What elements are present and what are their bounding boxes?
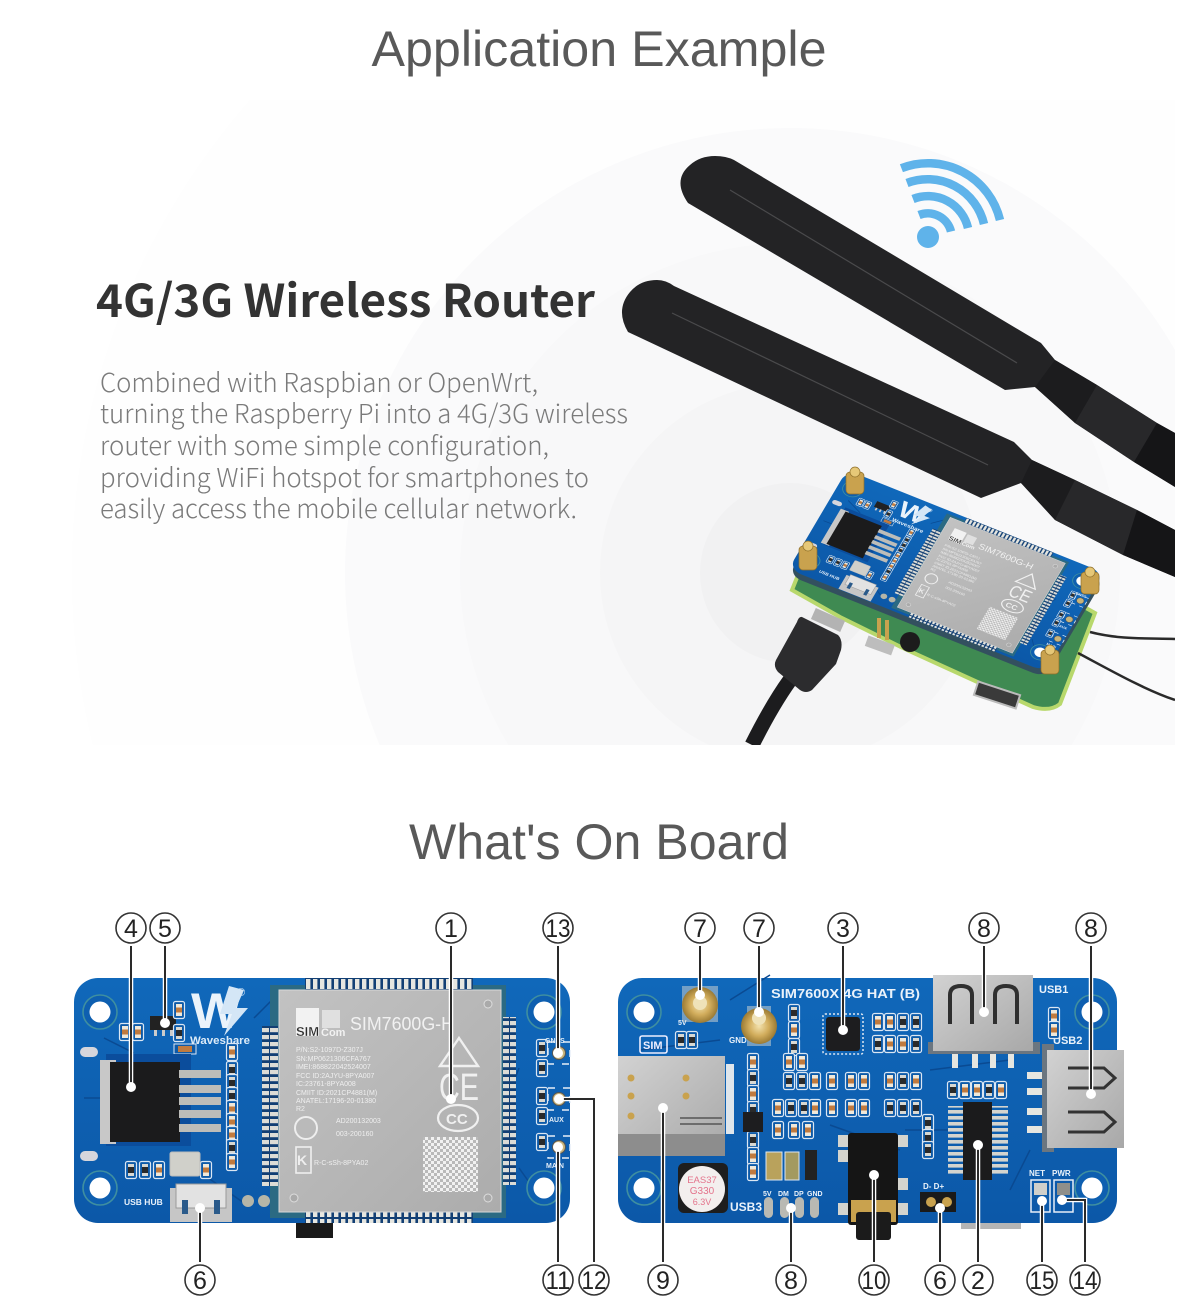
panel: board front view (74, 978, 570, 1238)
board silk text: D- D+ (923, 1182, 944, 1191)
numbers: 3 (836, 915, 850, 943)
number circles (116, 913, 1106, 1295)
status leds (1031, 1180, 1073, 1212)
ports on raspberry pi (865, 618, 1020, 708)
text block: description: turning the Raspberry Pi into a 4G/3G wireless (100, 394, 628, 431)
board silk text: GND (807, 1191, 823, 1198)
sim card slot (618, 1056, 734, 1156)
board silk text: USB2 (1053, 1035, 1082, 1047)
numbers: 11 (546, 1267, 570, 1295)
title: what's on board: What's On Board (409, 814, 789, 870)
usb connector 1 (928, 975, 1040, 1068)
numbers: 14 (1072, 1267, 1098, 1295)
numbers: 4 (124, 915, 138, 943)
icon: wifi signal (901, 163, 1000, 248)
text block: description: Combined with Raspbian or OpenWrt, (100, 363, 538, 400)
numbers: 7 (752, 915, 766, 943)
numbers: 9 (656, 1267, 670, 1295)
title: application example: Application Example (372, 21, 826, 77)
numbers: 8 (1084, 915, 1098, 943)
header pins d- d+ (920, 1192, 956, 1212)
antenna: upper (680, 156, 1175, 487)
hat board thickness edge (792, 567, 1100, 674)
numbers: 8 (784, 1267, 798, 1295)
text block: description: router with some simple configuration, (100, 426, 549, 463)
numbers (124, 915, 1098, 1295)
board silk text: NET (1029, 1169, 1045, 1178)
electrolytic capacitor: 6.3V (693, 1197, 711, 1207)
board silk text: 5V (678, 1020, 687, 1027)
electrolytic capacitor: G330 (690, 1186, 715, 1197)
numbers: 12 (582, 1267, 606, 1295)
black switch under board (296, 1222, 333, 1238)
antenna connectors (676, 986, 777, 1048)
copper traces (640, 975, 1030, 1190)
callout labels (116, 913, 1106, 1295)
audio codec chip (823, 1014, 863, 1054)
electrolytic capacitor (678, 1163, 728, 1213)
raspberry pi board under hat (792, 560, 1095, 709)
coax cables (1078, 632, 1175, 700)
front board (74, 978, 570, 1223)
panel: hero application image (600, 156, 1175, 745)
leader end dots (126, 990, 1096, 1213)
board silk text: USB1 (1039, 984, 1068, 996)
bottom usb port (961, 1223, 1021, 1229)
leader lines (131, 946, 1091, 1262)
numbers: 1 (444, 915, 458, 943)
antenna: lower (622, 280, 1175, 577)
usb connector 2 (1027, 1044, 1124, 1152)
numbers: 5 (158, 915, 172, 943)
electrolytic capacitor: EAS37 (687, 1175, 717, 1186)
board silk text: SIM7600X 4G HAT (B) (771, 986, 920, 1001)
audio jack (838, 1133, 908, 1240)
numbers: 8 (977, 915, 991, 943)
mounting holes (627, 995, 1109, 1205)
board silk text: DM (778, 1191, 789, 1198)
panel: board back view (618, 975, 1124, 1240)
usb hub chip (948, 1102, 1008, 1180)
text block: description (100, 363, 628, 526)
board silk text (678, 984, 1082, 1214)
sim label (640, 1036, 667, 1053)
text block: description: easily access the mobile cellular network. (100, 489, 577, 526)
numbers: 6 (933, 1267, 947, 1295)
numbers: 2 (971, 1267, 985, 1295)
board silk text: DP (794, 1191, 804, 1198)
product board in hero (788, 470, 1104, 672)
passive components (743, 1004, 1060, 1180)
board silk text: GND (729, 1036, 747, 1045)
back board base (618, 978, 1117, 1223)
board silk text: PWR (1052, 1169, 1071, 1178)
numbers: 6 (193, 1267, 207, 1295)
micro usb cable and plug (752, 608, 845, 745)
board silk text: USB3 (730, 1200, 762, 1214)
background circles (600, 388, 972, 745)
text block: description: providing WiFi hotspot for smartphones to (100, 458, 589, 495)
numbers: 13 (546, 915, 570, 943)
board silk text: 5V (763, 1191, 772, 1198)
numbers: 15 (1030, 1267, 1054, 1295)
heading: 4g/3g wireless router: 4G/3G Wireless Router (96, 265, 595, 330)
numbers: 10 (862, 1267, 886, 1295)
numbers: 7 (693, 915, 707, 943)
sim label: SIM (643, 1040, 663, 1052)
brass standoffs (799, 467, 1099, 674)
usb3 pads and capacitors (764, 1150, 819, 1218)
